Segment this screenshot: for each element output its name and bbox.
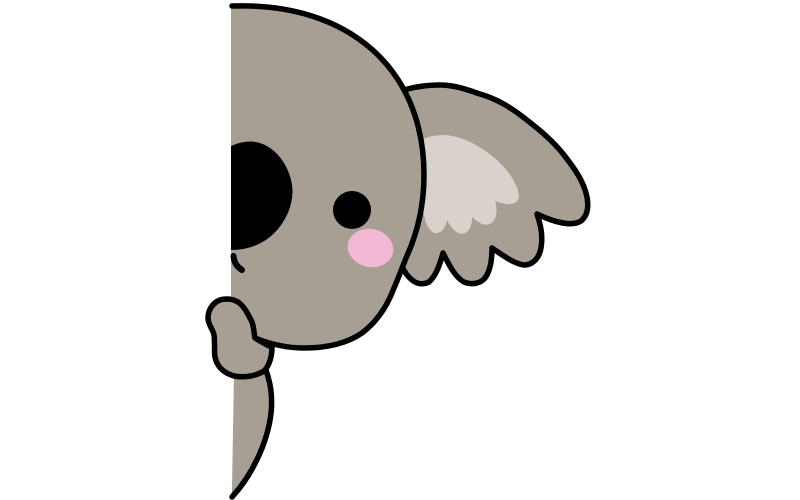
ear bbox=[398, 85, 588, 284]
paw bbox=[208, 299, 272, 377]
tail bbox=[232, 372, 272, 496]
inner ear bbox=[421, 135, 519, 234]
mouth bbox=[234, 256, 242, 270]
eye bbox=[333, 191, 371, 229]
cheek bbox=[344, 225, 397, 271]
tail outline bbox=[232, 370, 272, 497]
head outline bbox=[232, 6, 424, 348]
nose bbox=[231, 142, 292, 250]
ear shape bbox=[398, 85, 588, 284]
head bbox=[231, 6, 424, 348]
